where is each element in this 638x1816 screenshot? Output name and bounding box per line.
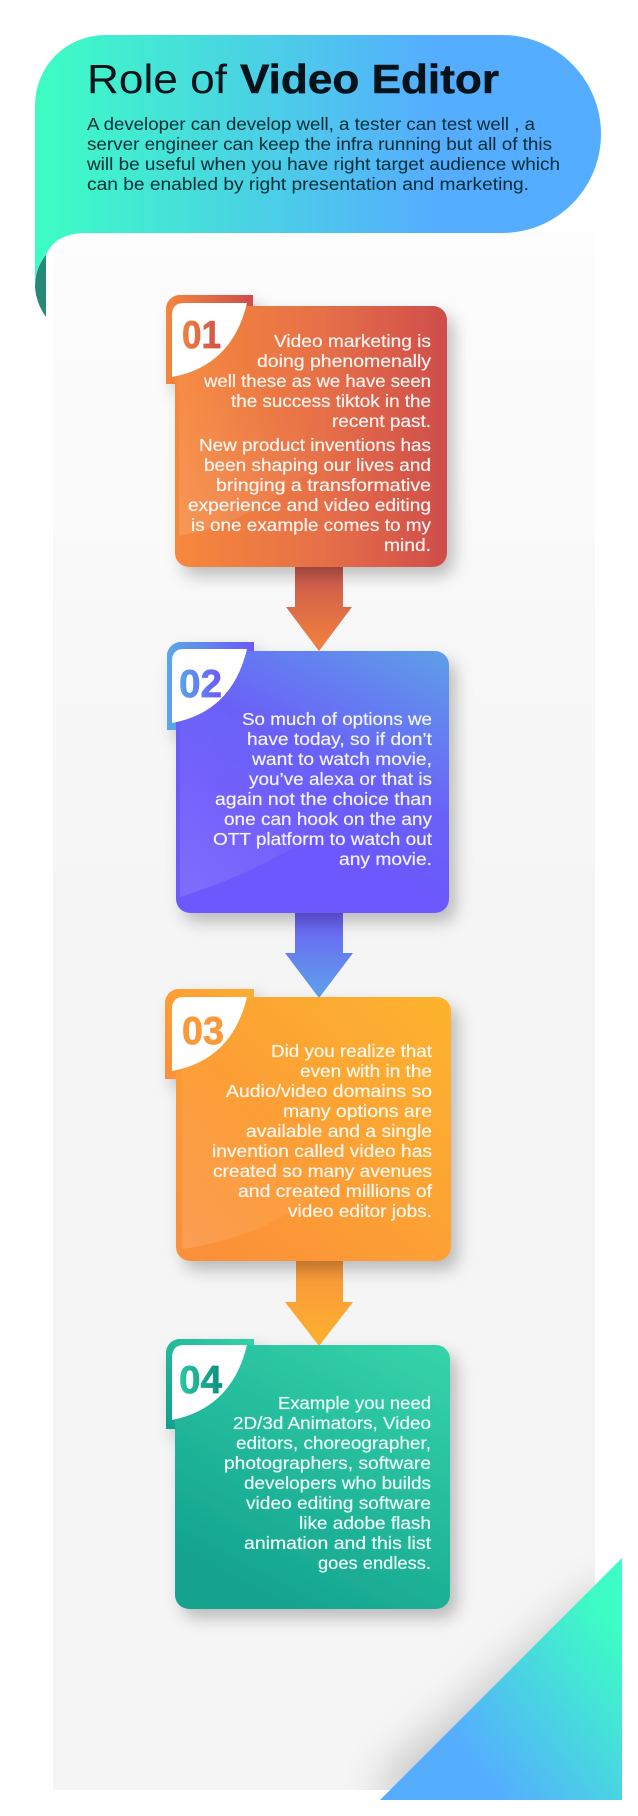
intro paragraph: can be enabled by right presentation and marketing. — [87, 174, 529, 194]
card 3 text: and created millions of — [238, 1181, 432, 1201]
step 1 card — [166, 295, 447, 651]
card 4 text: animation and this list — [244, 1533, 431, 1553]
card 1 text: is one example comes to my — [191, 515, 431, 535]
card 3 body — [165, 989, 451, 1261]
card 4 text: 2D/3d Animators, Video — [233, 1413, 431, 1433]
intro paragraph: A developer can develop well, a tester can test well , a — [87, 114, 535, 134]
banner ribbon fold — [35, 255, 46, 317]
card 3 text: created so many avenues — [213, 1161, 432, 1181]
card 3 text: Did you realize that — [271, 1041, 432, 1061]
card 1 text: experience and video editing — [188, 495, 431, 515]
card 4 text: video editing software — [246, 1493, 431, 1513]
fold shadow — [370, 1577, 595, 1790]
card 3 text: many options are — [283, 1101, 432, 1121]
card 2 tab corner — [167, 642, 254, 730]
card 1 text: recent past. — [332, 411, 431, 431]
card 3 text: Audio/video domains so — [226, 1081, 432, 1101]
title: Role of — [87, 56, 228, 102]
card 2 text — [213, 709, 432, 869]
card 3 text: video editor jobs. — [288, 1201, 432, 1221]
number 03: 03 — [182, 1010, 224, 1053]
step 3 card — [165, 989, 451, 1346]
number 01: 01 — [182, 314, 221, 357]
intro paragraph: server engineer can keep the infra running but all of this — [87, 134, 552, 154]
card 4 text: goes endless. — [318, 1553, 431, 1573]
arrow 1 — [286, 567, 352, 651]
corner fold — [380, 1558, 638, 1810]
card 2 text: one can hook on the any — [224, 809, 432, 829]
card 1 text: bringing a transformative — [216, 475, 431, 495]
card 2 body — [167, 642, 449, 913]
card 2 text: want to watch movie, — [251, 749, 432, 769]
card 1 text: Video marketing is — [274, 331, 431, 351]
number 02: 02 — [179, 663, 222, 706]
step 2 card — [167, 642, 449, 998]
card 1 text: been shaping our lives and — [204, 455, 431, 475]
card 3 text: available and a single — [246, 1121, 432, 1141]
card 1 text: doing phenomenally — [257, 351, 431, 371]
title — [87, 56, 499, 102]
card 4 text: Example you need — [278, 1393, 431, 1413]
header banner — [35, 35, 601, 317]
card 1 tab corner — [166, 295, 253, 384]
card 3 tab corner — [165, 989, 254, 1079]
card 3 number badge — [172, 997, 247, 1071]
card 2 highlight — [180, 700, 400, 897]
arrow 2 — [285, 913, 353, 998]
card 4 tab corner — [166, 1339, 254, 1429]
card 1 text: New product inventions has — [199, 435, 431, 455]
card 3 text — [212, 1041, 432, 1221]
card 1 highlight — [179, 340, 370, 536]
title: Video Editor — [240, 56, 499, 102]
card 2 number badge — [172, 649, 247, 723]
card 4 number badge — [172, 1345, 247, 1420]
card 1 text: mind. — [384, 535, 431, 555]
card 4 body — [166, 1339, 450, 1609]
card 1 body — [166, 295, 447, 567]
card 2 text: again not the choice than — [215, 789, 432, 809]
card 2 text: have today, so if don’t — [247, 729, 432, 749]
card 1 text: the success tiktok in the — [231, 391, 431, 411]
card 3 text: even with in the — [300, 1061, 432, 1081]
corner triangle — [380, 1558, 622, 1800]
intro paragraph — [86, 114, 560, 194]
card 3 highlight — [182, 1050, 345, 1249]
card 2 text: OTT platform to watch out — [213, 829, 432, 849]
card 1 text: well these as we have seen — [203, 371, 431, 391]
card 1 text — [188, 331, 431, 555]
white content panel — [53, 233, 595, 1790]
card 4 text: photographers, software — [224, 1453, 431, 1473]
card 1 number badge — [172, 303, 247, 377]
number 04: 04 — [179, 1359, 222, 1402]
card 4 text: editors, choreographer, — [236, 1433, 431, 1453]
card 2 text: any movie. — [339, 849, 432, 869]
card 4 text: developers who builds — [244, 1473, 431, 1493]
card 3 text: invention called video has — [212, 1141, 432, 1161]
card 4 text — [224, 1393, 431, 1573]
banner gradient shape — [35, 35, 601, 287]
step 4 card — [166, 1339, 450, 1609]
arrow 3 — [285, 1261, 353, 1346]
card 2 text: you’ve alexa or that is — [249, 769, 432, 789]
intro paragraph: will be useful when you have right target audience which — [86, 154, 560, 174]
card 2 text: So much of options we — [242, 709, 432, 729]
card 4 text: like adobe flash — [299, 1513, 431, 1533]
